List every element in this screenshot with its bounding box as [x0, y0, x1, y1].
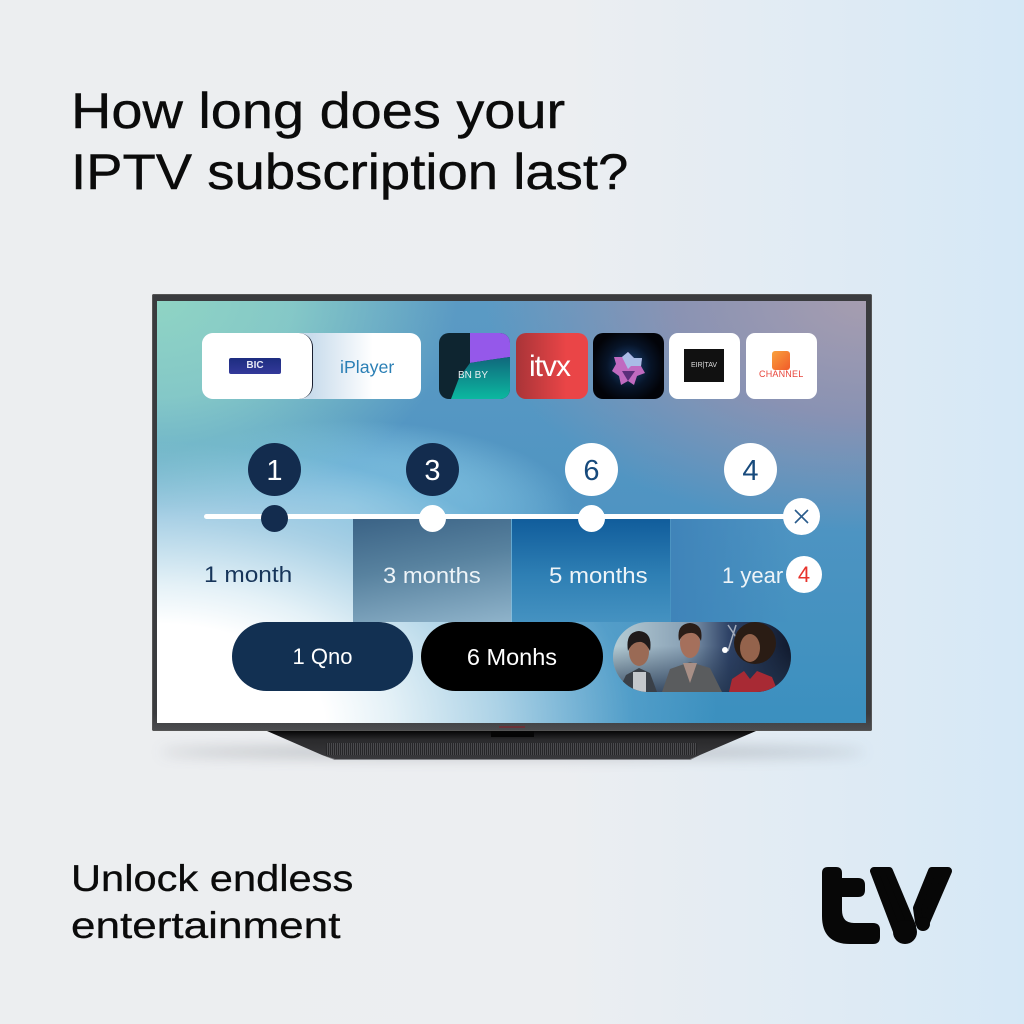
label: 5 months: 5 months: [549, 563, 648, 588]
app: channel tile: [746, 333, 817, 399]
tv stand: [267, 731, 756, 760]
pill: cast photo: [613, 622, 791, 692]
app row: [202, 333, 817, 399]
logo: tv: [822, 867, 952, 944]
node 2: [419, 505, 446, 532]
pill: 1 Qno: [232, 622, 413, 691]
duration labels: [204, 556, 822, 593]
timeline track: [204, 514, 794, 519]
pill: 6 Monhs: 6 Monhs: [467, 644, 557, 670]
BBC panel: [202, 333, 313, 399]
tv brand mark: [499, 726, 525, 728]
column: 3 months: [353, 518, 511, 622]
app: itvx tile: itvx: [529, 350, 570, 383]
app: itvx tile: [516, 333, 588, 399]
app: BBC tile: [439, 333, 510, 399]
close button: [783, 498, 820, 535]
title: [71, 83, 628, 200]
app: iPlayer card: [202, 333, 421, 399]
title: How long does your: [71, 83, 565, 139]
step badge 3: 3: [424, 455, 441, 487]
BBC panel: BIC: [246, 360, 264, 371]
tagline: entertainment: [71, 904, 340, 946]
red number badge: 4: [798, 562, 810, 587]
pill: 6 Monhs: [421, 622, 603, 691]
red number badge: [786, 556, 822, 593]
tv shadow: [160, 747, 865, 757]
tagline: [71, 857, 353, 946]
app: iPlayer card: iPlayer: [340, 357, 394, 377]
tv screen: [157, 301, 866, 723]
node 3: [578, 505, 605, 532]
app: star tile: [593, 333, 664, 399]
app: BBC tile: BN BY: [458, 370, 488, 381]
app: white tile with black logo: [669, 333, 740, 399]
app: channel tile: CHANNEL: [759, 369, 803, 379]
tagline: Unlock endless: [71, 857, 353, 899]
label: 1 month: 1 month: [204, 562, 292, 587]
node 1: [261, 505, 288, 532]
tv frame: [152, 294, 872, 731]
label: 3 months: 3 months: [383, 563, 481, 588]
column: 5 months: [512, 518, 670, 622]
step badge 6: 6: [583, 455, 600, 487]
step badge 3: [406, 443, 459, 496]
screen glow layers: [157, 301, 866, 723]
timeline steps: [248, 443, 820, 535]
column: 1 year: [671, 518, 791, 622]
step badge 6: [565, 443, 618, 496]
step badge 4: 4: [742, 455, 759, 487]
app: white tile with black logo: EIR|TAV: [691, 362, 717, 369]
step badge 1: [248, 443, 301, 496]
pill: 1 Qno: 1 Qno: [293, 644, 352, 669]
title: IPTV subscription last?: [71, 144, 628, 200]
step badge 4: [724, 443, 777, 496]
label: 1 year: 1 year: [722, 563, 783, 588]
step badge 1: 1: [266, 455, 283, 487]
